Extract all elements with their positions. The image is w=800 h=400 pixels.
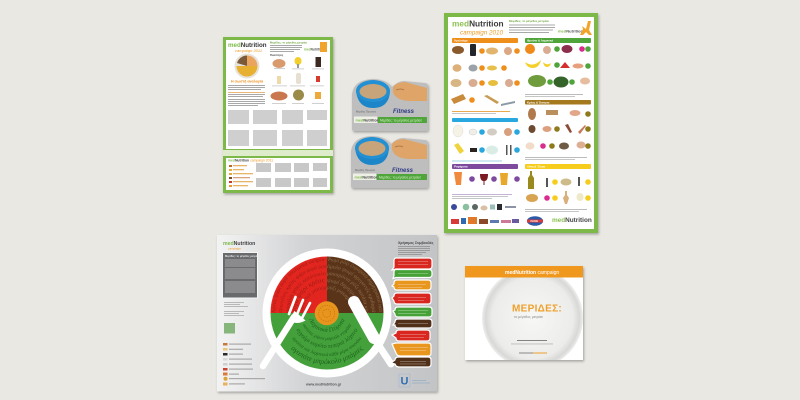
section: purple: Ροφήματα [454, 165, 468, 169]
placemat intro box [222, 252, 260, 298]
QR code [224, 323, 235, 334]
plate segment: green: σαλάτες χόρτα μαρούλι ντομάτα [303, 324, 351, 341]
leaflet captions [272, 68, 324, 104]
leaflet campaign line: campaign 2011 [235, 48, 262, 53]
bubble 4 [392, 293, 431, 304]
placemat campaign line: campaign [228, 246, 241, 250]
plate segment: green: φρούτα και λαχανικά κάθε μέρα σπανάκι [292, 337, 362, 356]
bubble text lines [398, 261, 428, 364]
plate segment: brown [326, 256, 384, 313]
plate segment: green: αγγούρι καρότο πιπεριά λάχανο [296, 328, 358, 348]
magnet Fitness brand: Fitness [393, 109, 415, 115]
plate segment: brown: άμυλο ψωμί φρυγανιές κριθαράκι πλιγούρι [327, 264, 376, 312]
booklet credits [511, 340, 553, 354]
Unilever logo [399, 374, 430, 388]
section: green [525, 38, 591, 97]
plate segment: red: Κρέας ψάρι αυγά πουλερικά όσπρια ξηροί καρποί [271, 258, 324, 313]
booklet title: ΜΕΡΙΔΕΣ: [512, 304, 562, 314]
placemat legend [223, 343, 265, 386]
poster sponsor logos [451, 204, 519, 224]
section: yellow: Λίπη & Έλαια [527, 165, 545, 169]
magnet brand line: Μερίδες Πρωινού [356, 110, 377, 114]
icon: fork [263, 297, 310, 366]
plate segment: red: αυγά ψάρι κρέας [292, 278, 324, 312]
panel: magnet 2 [351, 136, 428, 188]
leaflet logo: medNutrition [228, 42, 267, 49]
plate centre: orange [315, 301, 339, 325]
bubble 5 [393, 307, 432, 317]
icon: knife [354, 302, 391, 364]
section: blue [452, 118, 520, 162]
leaflet lower legend [229, 165, 253, 187]
leaflet small logo: medNutrition [304, 48, 324, 52]
section: orange: Άμυλούχα [454, 38, 468, 42]
bubble 1 [392, 258, 432, 270]
leaflet summary text [270, 45, 302, 52]
magnet Fitness brand: Fitness [392, 168, 414, 174]
booklet plate [482, 278, 583, 360]
plate segment: brown: ψωμί δημητριακά βρώμη [327, 278, 356, 296]
section: purple [452, 164, 520, 199]
icon: orange figure [580, 21, 592, 35]
poster logo: medNutrition [452, 18, 504, 28]
icon: cereal bowl [355, 137, 389, 165]
plate segment: brown: Ψωμί ρύζι ζυμαρικά δημητριακά πατάτες [328, 257, 382, 312]
section: green: Φρούτα & Λαχανικά [527, 38, 553, 42]
magnet logo: medNutrition [356, 118, 380, 122]
speech bubbles [391, 258, 432, 367]
section: yellow [525, 164, 591, 212]
plate segment: brown: ρύζι μακαρόνια [326, 286, 351, 310]
panel: booklet cover [465, 266, 583, 368]
plate segment: red [270, 256, 327, 313]
tips text [398, 246, 430, 255]
icon: cereal bowl [356, 80, 390, 108]
magnet green bar: Μερίδες: το μέγεθος μετράει! [380, 118, 422, 122]
leaflet lower logo: medNutrition campaign 2011 [228, 158, 273, 162]
Unilever logo: U [400, 376, 408, 388]
leaflet orange heading: Η σωστή αναλογία [231, 80, 264, 84]
icon: fist [392, 139, 427, 159]
magnet brand line: Μερίδες Πρωινού [355, 168, 376, 172]
section: orange [450, 38, 520, 114]
plate segment: green: Λαχανικά Γεύματα [309, 318, 344, 332]
FAGE logo: FAGE [530, 219, 538, 223]
leaflet intro text [228, 85, 265, 106]
tips heading: Χρήσιμες Συμβουλές [398, 241, 434, 245]
placemat intro box: Μερίδες: το μέγεθος μετράει [225, 254, 260, 258]
leaflet food lists [228, 110, 327, 146]
panel: magnet 1 [352, 79, 428, 131]
magnet logo: medNutrition [354, 176, 379, 180]
plate [260, 248, 394, 378]
plate segment: green [270, 313, 384, 370]
poster footer logo: medNutrition [552, 217, 592, 224]
bubble 3 [392, 280, 431, 290]
placemat contact text [224, 302, 248, 316]
plate segment: brown: μακαρόνια ρύζι πατάτα καλαμπόκι [327, 272, 369, 313]
magnet green bar: Μερίδες: το μέγεθος μετράει! [379, 175, 421, 179]
poster intro [509, 24, 555, 33]
bubble 2 [393, 270, 432, 278]
icon: portion plate [234, 54, 260, 78]
bubble 9 [391, 357, 431, 367]
website url: www.medNutrition.gr [305, 382, 342, 386]
icon: fist [393, 82, 427, 101]
FAGE logo [527, 216, 543, 226]
plate segment: red: φασόλια φακές κοτόπουλο χοιρινό [286, 272, 326, 313]
leaflet subheading: Ποσότητες [270, 53, 284, 57]
poster campaign line: campaign 2010 [460, 30, 504, 36]
plate segment: red: γάλα τυρί γιαούρτι [300, 285, 326, 313]
leaflet title: Μερίδες: το μέγεθος μετράει [270, 40, 307, 44]
section: brown [525, 100, 591, 160]
panel: folded leaflet [223, 37, 333, 193]
bubble 6 [393, 319, 432, 328]
poster title: Μερίδες: το μέγεθος μετράει [509, 19, 549, 23]
booklet subtitle: το μέγεθος μετράει [514, 315, 543, 319]
placemat logo: medNutrition [223, 241, 255, 247]
bubble 7 [392, 330, 430, 341]
leaflet lower lists [256, 163, 327, 187]
bubble 8 [392, 343, 431, 356]
poster small logo: medNutrition [558, 28, 583, 34]
booklet header: medNutrition campaign [505, 270, 559, 276]
panel: poster [444, 13, 598, 233]
plate segment: green: αγαπάτε μπρόκολο μπάμιες [291, 346, 364, 366]
panel: plate placemat [216, 235, 440, 394]
leaflet food icons [270, 57, 321, 100]
section: brown: Κρέας & Όσπρια [527, 100, 550, 104]
icon: orange figure [320, 42, 327, 52]
plate segment: red: πρωτεΐνες κρέας ψάρι αυγά όσπρια μοσχάρι [280, 264, 327, 313]
